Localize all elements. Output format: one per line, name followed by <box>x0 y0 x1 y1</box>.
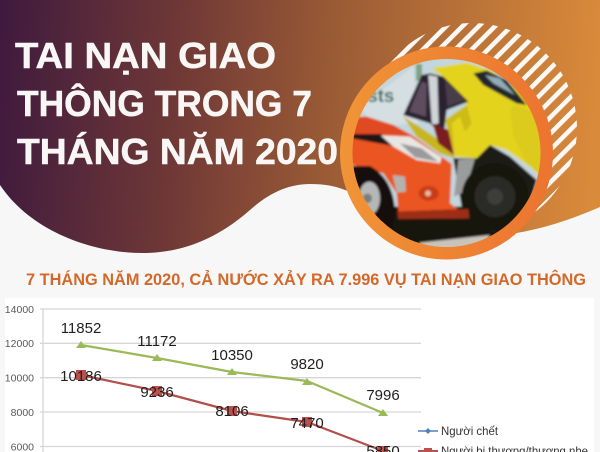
data labels: 7996 <box>366 387 400 404</box>
title: TAI NẠN GIAO <box>15 35 276 76</box>
header gradient blob <box>0 0 600 253</box>
red line series <box>76 370 388 452</box>
subtitle: 7 THÁNG NĂM 2020, CẢ NƯỚC XẢY RA 7.996 VỤ TAI NẠN GIAO THÔNG <box>26 270 586 289</box>
data labels: 9236 <box>140 384 174 401</box>
data labels <box>60 320 400 452</box>
data labels: 10350 <box>211 347 253 364</box>
hatched circle decoration <box>367 23 577 233</box>
y axis labels <box>5 304 34 452</box>
y axis labels: 10000 <box>5 372 34 384</box>
data labels: 11852 <box>61 320 101 337</box>
photo: car crash <box>352 59 540 247</box>
green line series <box>76 341 388 416</box>
title <box>15 35 338 172</box>
y axis labels: 14000 <box>5 304 34 316</box>
title: THÁNG NĂM 2020 <box>17 131 338 172</box>
orange ring <box>340 46 553 260</box>
y axis labels: 8000 <box>11 407 34 419</box>
data labels: 11172 <box>137 333 177 350</box>
photo: car crash: sts <box>367 85 394 106</box>
gridlines and axis <box>40 309 421 452</box>
y axis labels: 12000 <box>5 338 34 350</box>
legend <box>418 424 588 452</box>
legend: Người chết <box>441 424 499 438</box>
data labels: 10186 <box>60 368 102 385</box>
data labels: 8106 <box>215 403 249 420</box>
data labels: 7470 <box>290 415 324 432</box>
chart panel <box>5 298 594 452</box>
title: THÔNG TRONG 7 <box>17 82 312 124</box>
data labels: 9820 <box>290 356 324 373</box>
